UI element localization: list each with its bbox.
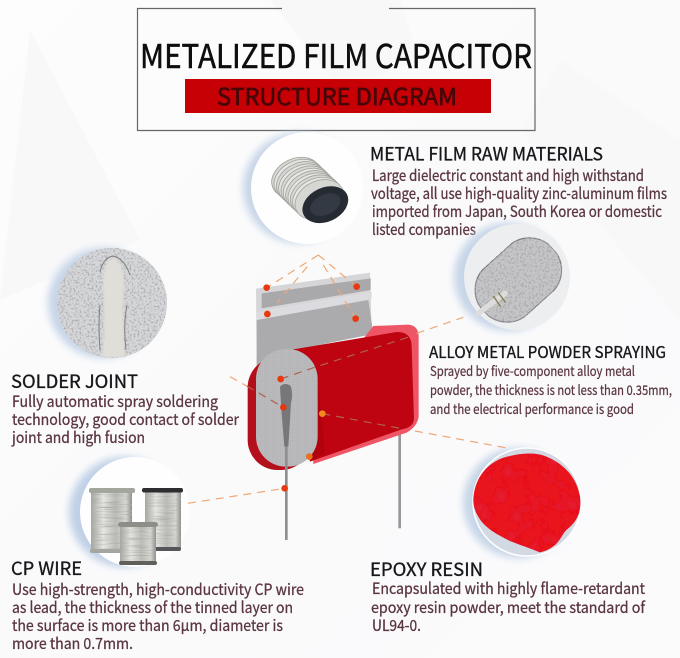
text: solder joint — [11, 368, 240, 448]
description — [12, 578, 304, 654]
metal film layers — [256, 273, 373, 368]
icon: alloy powder spray photo — [454, 223, 574, 335]
description: and the electrical performance is good — [430, 398, 634, 418]
capacitor body shading — [293, 349, 325, 462]
callout lines — [188, 255, 507, 503]
icon: solder joint photo — [48, 248, 167, 358]
heading: EPOXY RESIN — [370, 556, 483, 582]
description: listed companies — [372, 218, 476, 240]
text: epoxy resin — [370, 556, 646, 636]
front spool — [118, 522, 158, 565]
lead wire right — [398, 427, 401, 528]
description: UL94-0. — [372, 614, 421, 636]
description: technology, good contact of solder — [12, 408, 240, 430]
capacitor diagram — [188, 255, 507, 540]
lead wire left — [285, 447, 288, 540]
header frame — [138, 8, 535, 130]
description: epoxy resin powder, meet the standard of — [371, 596, 646, 618]
callout dots — [263, 283, 360, 492]
capacitor body — [293, 332, 414, 462]
solder slug — [280, 384, 292, 447]
description: joint and high fusion — [11, 426, 145, 448]
heading: ALLOY METAL POWDER SPRAYING — [429, 339, 666, 363]
title: METALIZED FILM CAPACITOR — [140, 30, 532, 78]
description — [11, 390, 240, 448]
description — [371, 577, 646, 636]
description: Sprayed by five-component alloy metal — [430, 360, 635, 380]
description: more than 0.7mm. — [12, 632, 133, 654]
text: alloy metal powder spraying — [429, 339, 672, 418]
description: Encapsulated with highly flame-retardant — [372, 577, 645, 599]
capacitor body back shell — [310, 325, 419, 464]
subtitle bar: STRUCTURE DIAGRAM — [217, 78, 457, 112]
description: Use high-strength, high-conductivity CP wire — [12, 578, 304, 600]
text: metal film raw materials — [370, 140, 667, 240]
icon: CP wire spools photo — [69, 457, 190, 567]
description — [430, 360, 672, 418]
dark red edge behind end cap — [248, 357, 311, 470]
right spool — [142, 488, 183, 551]
header panel — [138, 8, 535, 130]
heading: SOLDER JOINT — [11, 368, 138, 394]
left spool — [89, 488, 135, 553]
description: Fully automatic spray soldering — [12, 390, 218, 412]
end cap mesh — [256, 349, 318, 467]
icon: metal film roll photo — [243, 132, 363, 244]
description: as lead, the thickness of the tinned layer on — [12, 596, 293, 618]
description — [371, 164, 667, 240]
text: CP wire — [11, 555, 304, 654]
description: the surface is more than 6μm, diameter is — [12, 614, 283, 636]
heading: METAL FILM RAW MATERIALS — [370, 140, 603, 166]
icon: epoxy resin powder photo — [463, 448, 581, 558]
heading: CP WIRE — [11, 555, 82, 581]
